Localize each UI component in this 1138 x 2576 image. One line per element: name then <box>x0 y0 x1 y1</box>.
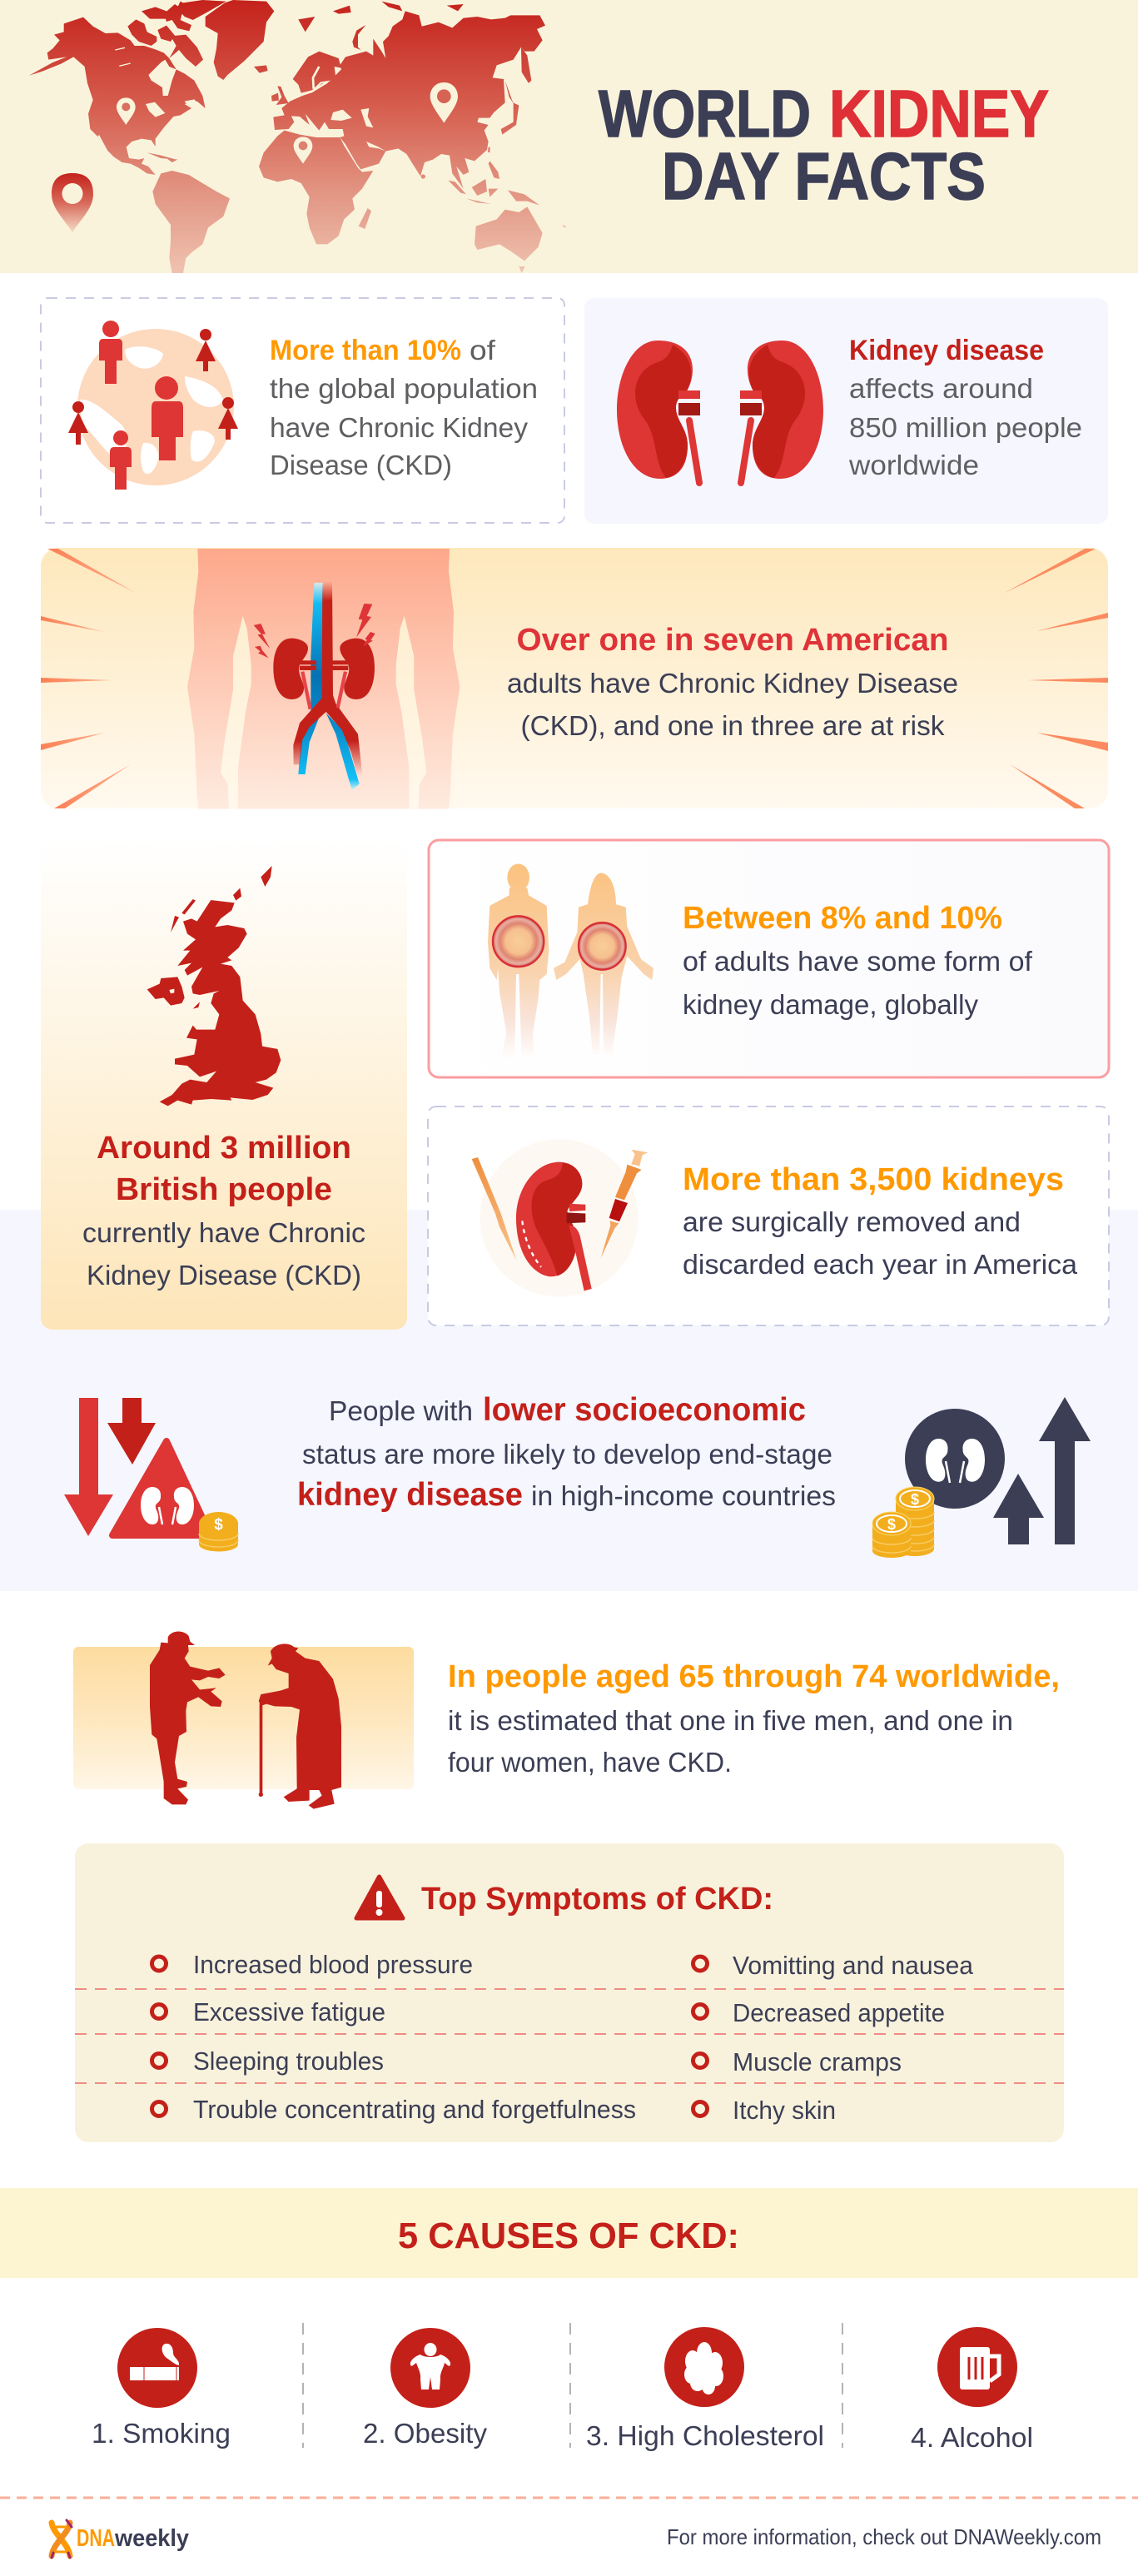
gradient backdrop <box>73 1647 414 1789</box>
text: 3,500 kidneys <box>683 1162 1078 1280</box>
text: over one in seven: (CKD), and one in three are at risk <box>521 710 945 741</box>
text: 3 million: currently have Chronic <box>82 1217 365 1248</box>
label: 2. Obesity <box>363 2418 487 2449</box>
dark circle <box>905 1409 1005 1509</box>
text: kidney disease: Kidney disease <box>849 335 1044 366</box>
label: 4. Alcohol <box>911 2422 1033 2453</box>
icon: fat cells <box>664 2327 744 2407</box>
title <box>599 77 1049 213</box>
panel: kidney disease 850 million <box>584 298 1108 524</box>
text: between 8% and 10% <box>683 901 1033 1020</box>
symptoms list right <box>733 1951 974 2125</box>
label: 3. High Cholesterol <box>586 2420 824 2451</box>
vessels <box>569 1204 585 1211</box>
text: between 8% and 10%: of adults have some form of <box>683 946 1033 977</box>
symptoms list left: Sleeping troubles <box>193 2046 384 2076</box>
world map with pins <box>29 0 565 273</box>
text: kidney disease: affects around <box>849 373 1033 404</box>
icon: decline arrows, warning triangle, coins <box>64 1398 238 1552</box>
header panel <box>0 0 1138 273</box>
text: between 8% and 10%: Between 8% and 10% <box>683 901 1002 936</box>
wordmark: weekly <box>114 2525 189 2552</box>
right kidney <box>740 341 823 483</box>
icon: overweight person <box>390 2328 470 2408</box>
symptoms list right: Decreased appetite <box>733 1998 945 2027</box>
text: lower socioeconomic: People with <box>329 1395 473 1426</box>
icon: cigarette <box>117 2328 197 2408</box>
band background <box>0 2188 1138 2278</box>
text: 3 million: Kidney Disease (CKD) <box>87 1260 361 1290</box>
band background <box>41 548 1108 808</box>
rays left <box>41 549 136 808</box>
icon: beer mug <box>937 2327 1017 2407</box>
footer logo <box>52 2520 189 2558</box>
ureters <box>302 672 345 709</box>
icon: kidney, scalpel and syringe <box>472 1139 648 1296</box>
card border <box>41 298 564 523</box>
background: lavender band <box>0 1210 1138 1591</box>
panel: top symptoms <box>75 1843 1064 2142</box>
card border <box>429 840 1109 1077</box>
rays right <box>1005 549 1108 808</box>
arrow up tall <box>1039 1397 1091 1544</box>
text: more than 10%: Disease (CKD) <box>270 450 452 480</box>
icon: rising arrows, kidneys, coins <box>872 1397 1091 1558</box>
text: aged 65 through 74 <box>448 1659 1060 1778</box>
short coin stack <box>872 1512 911 1558</box>
text: 3,500 kidneys: More than 3,500 kidneys <box>683 1162 1064 1197</box>
panel background <box>75 1843 1064 2142</box>
panel: causes <box>92 2327 1033 2453</box>
icon: pair of kidneys <box>617 341 823 483</box>
male figure <box>488 863 549 1059</box>
panel: American adults <box>41 548 1108 809</box>
text: lower socioeconomic: kidney disease <box>297 1477 523 1513</box>
pin: Asia <box>430 82 458 123</box>
pain bolts <box>254 604 375 658</box>
panel: kidneys removed <box>428 1106 1109 1325</box>
illustration: elderly couple <box>150 1632 341 1809</box>
text: lower socioeconomic: lower socioeconomic <box>483 1392 806 1428</box>
text: 3 million <box>82 1131 365 1290</box>
aorta and iliac arteries <box>293 581 362 776</box>
symptoms heading: Top Symptoms of CKD: <box>421 1882 773 1917</box>
syringe <box>601 1150 648 1258</box>
pin: America <box>117 97 136 125</box>
panel background <box>41 839 407 1330</box>
text: more than 10%: the global population <box>270 373 538 404</box>
text: more than 10%: of <box>470 335 496 366</box>
panel: British people <box>41 839 407 1330</box>
map: Africa, Eurasia, Oceania <box>259 2 565 273</box>
white kidneys <box>926 1439 985 1483</box>
text: lower socioeconomic: status are more likely to develop end-stage <box>302 1439 832 1470</box>
text: aged 65 through 74: it is estimated that one in five men, and one in <box>448 1705 1013 1736</box>
coin stack <box>199 1512 238 1552</box>
white kidneys <box>141 1487 194 1524</box>
card background <box>584 298 1108 524</box>
cause: smoking <box>92 2328 231 2449</box>
panel: elderly people <box>73 1632 1060 1809</box>
symptoms list left: Excessive fatigue <box>193 1997 385 2026</box>
panel: kidney damage <box>429 840 1109 1077</box>
title line 2: DAY FACTS <box>662 139 986 213</box>
symptoms list right: Itchy skin <box>733 2096 836 2125</box>
text: kidney disease: 850 million people <box>849 412 1082 443</box>
wordmark: DNA <box>77 2525 115 2552</box>
cause: alcohol <box>911 2327 1033 2453</box>
text: kidney disease <box>848 335 1082 480</box>
left kidney <box>617 341 700 483</box>
torso silhouette <box>187 549 460 809</box>
wordmark <box>77 2525 189 2552</box>
text: lower socioeconomic: in high-income countries <box>531 1480 836 1511</box>
coin stack: $ <box>214 1516 223 1534</box>
icon: warning triangle <box>356 1877 403 1918</box>
pin: large location marker <box>52 173 93 232</box>
icon: male and female bodies <box>488 863 653 1059</box>
panel: causes heading band <box>0 2188 1138 2278</box>
text: 3 million: British people <box>116 1172 332 1207</box>
panel: global population <box>41 298 564 523</box>
cause: obesity <box>363 2328 487 2449</box>
title line 1: WORLD <box>599 77 811 151</box>
arrow down long <box>64 1398 113 1536</box>
arm gaps <box>221 616 426 809</box>
cause: high cholesterol <box>586 2327 824 2451</box>
vein <box>298 583 360 790</box>
text: more than 10%: More than 10% <box>270 335 461 366</box>
arrow up short <box>993 1474 1044 1544</box>
bullets left <box>152 1957 166 2116</box>
text: 3,500 kidneys: discarded each year in America <box>683 1249 1078 1280</box>
card border <box>428 1106 1109 1325</box>
tall coin stack <box>896 1487 934 1556</box>
warning triangle <box>112 1441 211 1535</box>
text: over one in seven <box>507 623 958 741</box>
kidneys <box>273 639 375 699</box>
text: aged 65 through 74: In people aged 65 through 74 worldwide, <box>448 1659 1060 1694</box>
label: 1. Smoking <box>92 2418 231 2449</box>
header background <box>0 0 1138 273</box>
footer source note: For more information, check out DNAWeekly.com <box>667 2524 1101 2549</box>
text: more than 10%: have Chronic Kidney <box>270 412 529 443</box>
symptoms list left: Trouble concentrating and forgetfulness <box>193 2095 636 2124</box>
tall coin stack: $ <box>911 1491 919 1508</box>
text: aged 65 through 74: four women, have CKD. <box>448 1747 732 1778</box>
text: between 8% and 10%: kidney damage, globally <box>683 989 978 1020</box>
female figure <box>554 873 653 1054</box>
symptoms list right: Muscle cramps <box>733 2047 902 2076</box>
scalpel <box>472 1157 517 1261</box>
icon: globe with people <box>68 321 238 490</box>
map: Americas <box>29 0 274 273</box>
title line 1: KIDNEY <box>829 77 1049 151</box>
woman with cane <box>259 1644 341 1809</box>
text: 3 million: Around 3 million <box>97 1131 351 1166</box>
bullets right <box>693 1957 708 2116</box>
icon: DNA helix <box>52 2520 72 2558</box>
text: more than 10% <box>270 335 538 480</box>
man <box>150 1632 226 1804</box>
illustration: torso with kidneys and vessels <box>187 549 460 809</box>
arrow down short <box>107 1398 156 1465</box>
causes heading: 5 CAUSES OF CKD: <box>398 2215 739 2256</box>
symptoms list left <box>193 1950 636 2124</box>
panel: socioeconomic <box>64 1392 1091 1558</box>
text: 3,500 kidneys: are surgically removed and <box>683 1206 1021 1237</box>
text: over one in seven: adults have Chronic Kidney Disease <box>507 668 958 699</box>
symptoms list left: Increased blood pressure <box>193 1950 473 1979</box>
kidney <box>516 1162 582 1276</box>
incision stitches <box>522 1221 541 1267</box>
text: over one in seven: Over one in seven American <box>516 623 949 658</box>
pin: Africa <box>294 137 312 164</box>
text: lower socioeconomic <box>297 1392 836 1513</box>
symptoms list right: Vomitting and nausea <box>733 1951 974 1980</box>
map: United Kingdom <box>147 866 281 1106</box>
text: kidney disease: worldwide <box>848 450 979 480</box>
short coin stack: $ <box>887 1516 896 1533</box>
title line 1 <box>599 77 1049 151</box>
